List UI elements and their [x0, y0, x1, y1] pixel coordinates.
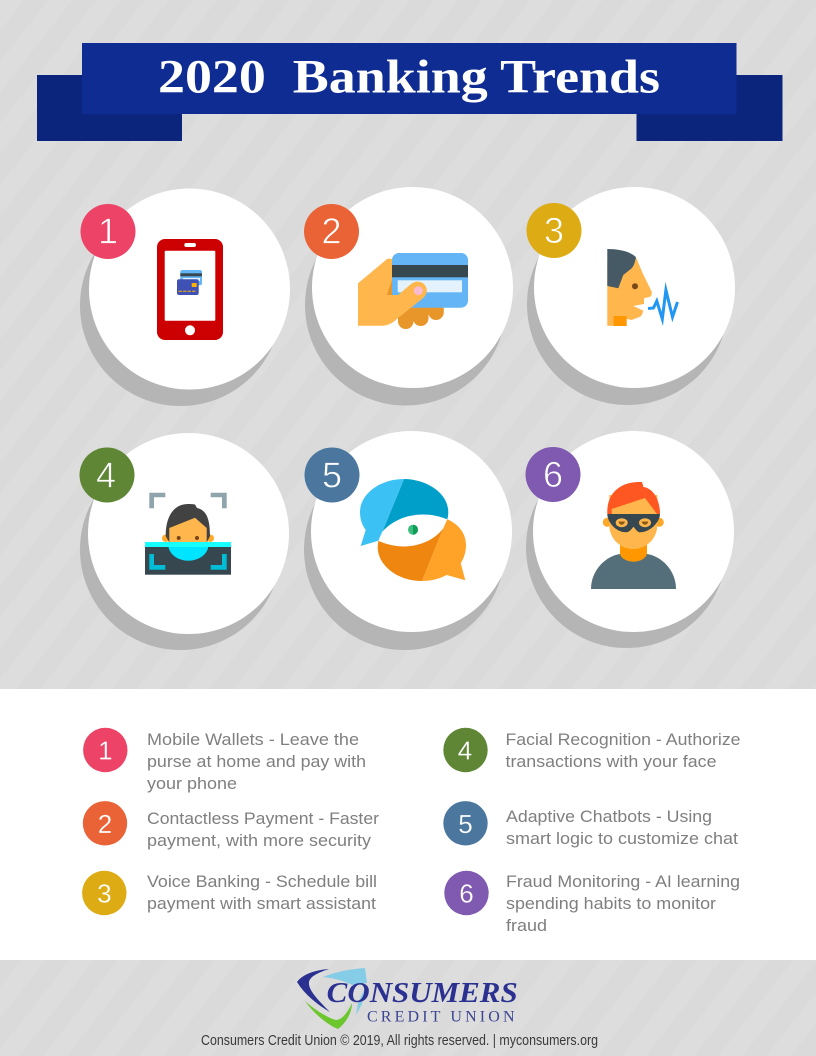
legend item 5 [443, 801, 738, 848]
legend item 6: spending habits to monitor [506, 894, 716, 913]
icon: speaking face [607, 249, 678, 326]
panel: trend 3 voice banking [526, 187, 735, 405]
legend item 4: transactions with your face [506, 752, 716, 771]
icon: hand holding card [358, 253, 468, 329]
badge 4 [80, 448, 134, 502]
legend item 1: 1 [98, 736, 113, 766]
legend item 5: Adaptive Chatbots - Using [506, 807, 712, 826]
panel: trend 2 contactless payment [304, 187, 513, 406]
legend item 3: payment with smart assistant [147, 894, 376, 913]
legend item 2: Contactless Payment - Faster [147, 809, 379, 828]
panel: trend 4 facial recognition [80, 433, 289, 650]
legend item 5: 5 [458, 809, 473, 839]
logo: Consumers Credit Union: CONSUMERS [327, 977, 518, 1009]
legend item 3: 3 [97, 878, 112, 908]
icon: face scan [145, 493, 231, 575]
badge 2: 2 [321, 210, 342, 252]
icon: phone with cards [157, 239, 223, 340]
legend item 6: 6 [459, 878, 474, 908]
badge 1: 1 [98, 210, 118, 252]
legend item 1: your phone [147, 774, 237, 793]
legend item 1: Mobile Wallets - Leave the [147, 730, 359, 749]
legend item 1 [83, 728, 366, 793]
badge 5 [304, 448, 360, 502]
legend item 1: purse at home and pay with [147, 752, 366, 771]
badge 3 [526, 203, 582, 258]
logo: Consumers Credit Union [297, 968, 518, 1029]
icon: masked thief [591, 482, 676, 589]
legend item 4: 4 [458, 736, 472, 766]
icon: chat bubbles with eye [360, 479, 466, 581]
footer text: Consumers Credit Union © 2019, All rights reserved. | myconsumers.org [201, 1033, 598, 1049]
panel: trend 6 fraud monitoring [526, 431, 734, 648]
legend item 4 [443, 728, 740, 772]
badge 3: 3 [544, 210, 564, 251]
panel: trend 1 mobile wallets [80, 188, 290, 406]
legend item 6: fraud [506, 916, 547, 935]
badge 4: 4 [96, 454, 116, 496]
legend item 3: Voice Banking - Schedule bill [147, 872, 377, 891]
legend item 2: 2 [98, 809, 112, 839]
badge 6 [526, 447, 580, 502]
legend item 6 [444, 871, 740, 935]
legend item 4: Facial Recognition - Authorize [506, 730, 740, 749]
legend item 2: payment, with more security [147, 831, 372, 850]
panel: legend [0, 689, 816, 960]
title banner [37, 43, 782, 141]
legend item 3 [82, 871, 377, 915]
badge 6: 6 [543, 454, 563, 495]
title: 2020 Banking Trends [158, 50, 660, 104]
legend item 5: smart logic to customize chat [506, 829, 738, 848]
logo: Consumers Credit Union: CREDIT UNION [367, 1009, 515, 1026]
legend item 6: Fraud Monitoring - AI learning [506, 872, 740, 891]
badge 1 [80, 204, 136, 259]
legend item 2 [83, 801, 379, 850]
badge 2 [304, 204, 359, 259]
badge 5: 5 [322, 454, 342, 496]
panel: trend 5 adaptive chatbots [304, 431, 512, 650]
